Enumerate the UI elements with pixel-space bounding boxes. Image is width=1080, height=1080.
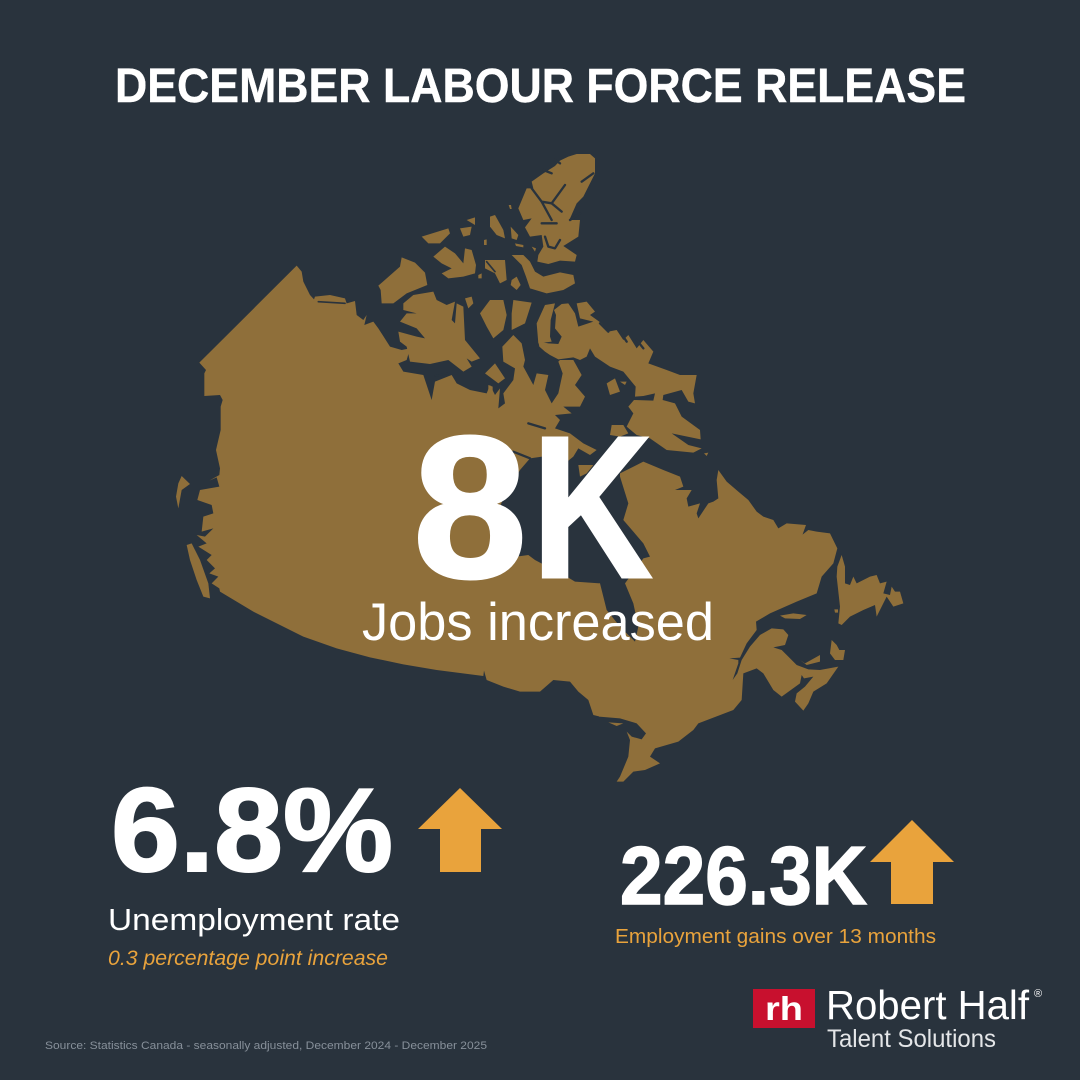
note: percentage point increase: 0.3 percentage point increase	[108, 947, 388, 970]
headline label: Jobs increased	[362, 593, 714, 652]
mainland east	[599, 462, 838, 782]
coastal detail	[318, 262, 547, 376]
mainland west and north	[197, 266, 600, 717]
label: employment gains: Employment gains over 13 months	[615, 926, 936, 948]
headline number: 8K: 8	[413, 394, 527, 620]
logo: Robert Half Talent Solutions: rh	[765, 990, 803, 1027]
map of Canada	[176, 154, 903, 782]
logo: Robert Half Talent Solutions: Robert Half	[826, 982, 1030, 1028]
logo: Robert Half Talent Solutions: Talent Solutions	[827, 1025, 996, 1053]
logo: Robert Half Talent Solutions	[753, 982, 1042, 1053]
icon: up arrow, employment gains	[870, 820, 954, 904]
fjords and inlets	[513, 160, 643, 458]
icon: up arrow, unemployment	[418, 788, 502, 872]
headline number: 8K: K	[532, 394, 652, 620]
western Arctic islands	[378, 217, 505, 393]
stat: unemployment rate: 6.8%	[111, 764, 393, 897]
eastern Arctic islands	[480, 154, 708, 477]
logo: Robert Half Talent Solutions: ®	[1034, 988, 1042, 1000]
headline number: 8K	[413, 394, 652, 620]
label: unemployment rate: Unemployment rate	[108, 902, 400, 937]
source note: Source: Statistics Canada - seasonally adjusted, December 2024 - December 2025	[45, 1040, 487, 1052]
stat: employment gains: 226.3K	[620, 829, 867, 922]
Pacific islands	[176, 476, 210, 598]
title: DECEMBER LABOUR FORCE RELEASE	[115, 60, 966, 113]
Atlantic islands	[608, 555, 903, 726]
